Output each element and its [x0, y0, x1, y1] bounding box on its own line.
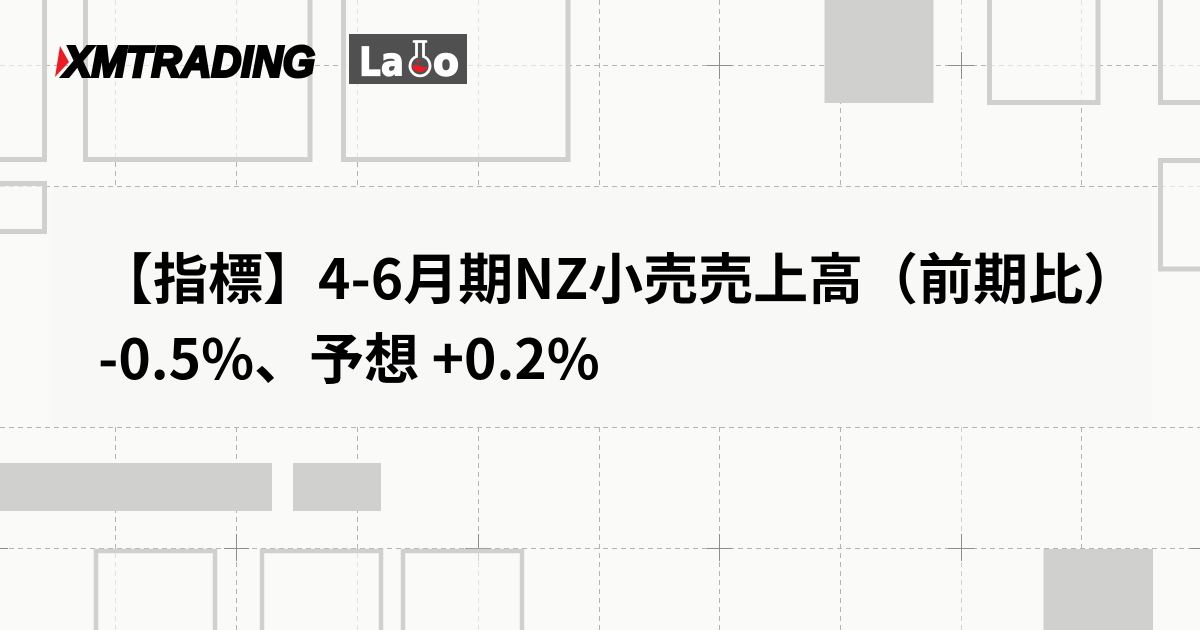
outlined frames: top row	[0, 0, 1200, 160]
icon: red arrow	[55, 46, 69, 77]
centre panel	[52, 186, 1152, 427]
title	[98, 235, 1138, 395]
wordmark: XMTRADING	[61, 38, 315, 86]
icon: flask	[410, 42, 430, 76]
logo letter o: o	[433, 40, 459, 86]
logo: Lab	[349, 34, 467, 86]
outlined frames: side row	[0, 160, 1200, 269]
logo: XMTRADING	[55, 38, 315, 86]
logo letters: La	[359, 40, 404, 86]
title: 【指標】4-6月期NZ小売売上高（前期比）	[98, 235, 1138, 315]
outlined frames: bottom row	[96, 551, 522, 630]
title: -0.5%、予想 +0.2%	[98, 315, 600, 395]
logo background	[349, 34, 467, 84]
